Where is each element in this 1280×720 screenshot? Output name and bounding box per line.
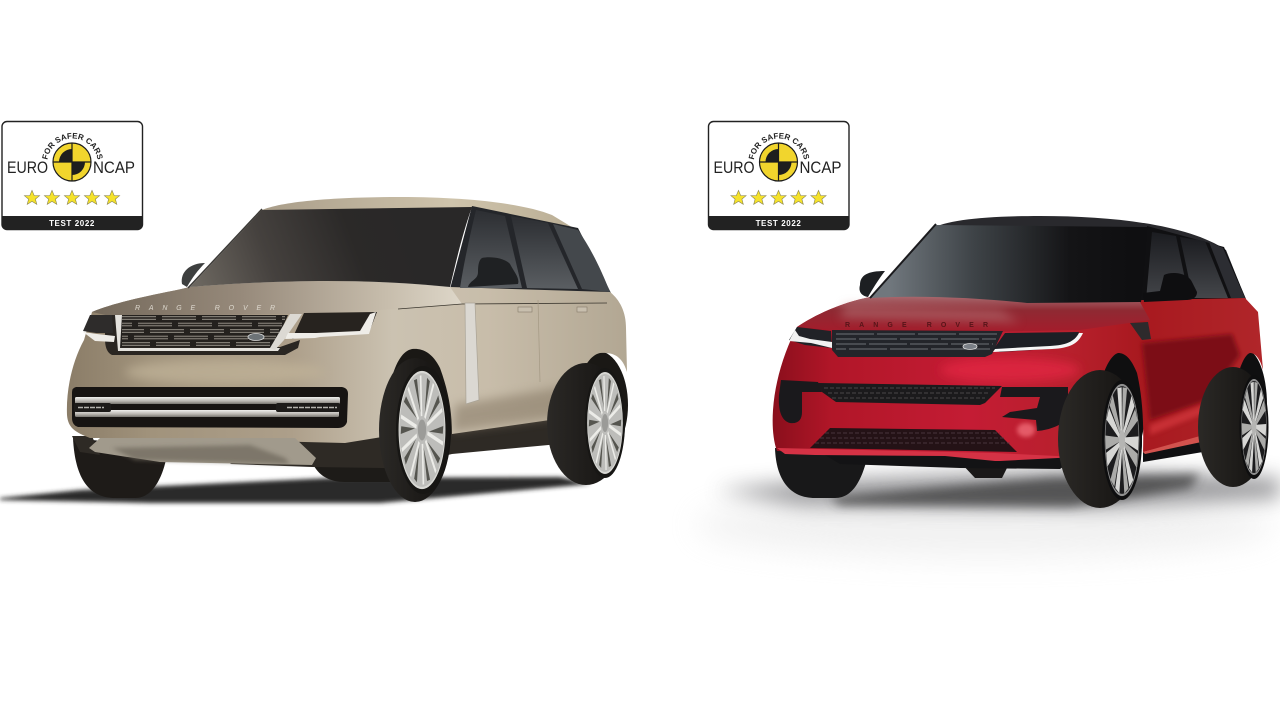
rear wheel well xyxy=(1225,350,1267,460)
car: Range Rover Sport in red xyxy=(695,216,1280,557)
chrome bars xyxy=(74,397,340,417)
hood xyxy=(797,296,1150,332)
right black band and vent xyxy=(1000,387,1068,431)
hood lettering: RANGE ROVER xyxy=(845,322,988,329)
car: Range Rover in champagne xyxy=(0,197,628,503)
front wheel xyxy=(379,358,451,502)
hood lettering: RANGE ROVER xyxy=(135,305,275,312)
grille xyxy=(832,330,1003,357)
lower black body xyxy=(820,452,1080,469)
badge: Euro NCAP left xyxy=(1,120,144,230)
door mirror right xyxy=(468,257,518,287)
door lower shading xyxy=(452,385,575,432)
badge: Euro NCAP right xyxy=(708,120,850,230)
roof xyxy=(932,216,1240,285)
badge footer xyxy=(708,216,849,230)
five stars xyxy=(731,190,826,204)
near front-left tyre xyxy=(775,448,868,498)
ground shadow under Range Rover Sport xyxy=(715,470,1280,508)
near front-left tyre xyxy=(73,438,168,498)
front light glare xyxy=(1017,423,1035,437)
grille surround xyxy=(105,315,300,355)
rear wheel well xyxy=(568,351,628,459)
right light signature xyxy=(285,312,376,339)
footer text: TEST 2022 xyxy=(49,219,95,228)
five stars xyxy=(24,190,120,204)
right headlight xyxy=(292,312,377,339)
greenhouse backing xyxy=(450,206,611,293)
badge frame xyxy=(708,122,849,230)
right light signature xyxy=(993,333,1083,352)
left headlight xyxy=(83,315,113,333)
side vent xyxy=(465,303,479,404)
dark central shadow xyxy=(830,474,1200,507)
bumper highlight xyxy=(125,360,325,384)
right headlight xyxy=(993,332,1079,352)
far-side tyre xyxy=(960,462,1010,478)
ground shadow under Range Rover xyxy=(0,477,590,503)
left headlight xyxy=(789,327,832,348)
roof xyxy=(258,197,580,232)
A-pillar xyxy=(188,209,262,288)
NCAP wordmark: NCAP xyxy=(93,158,135,177)
rear wheel xyxy=(547,363,625,485)
beltline xyxy=(398,303,607,309)
lower grille xyxy=(72,387,348,428)
far-side tyre xyxy=(312,462,395,482)
crash test target xyxy=(760,143,798,181)
windshield xyxy=(870,225,1148,303)
door details xyxy=(518,300,587,382)
door mirror left xyxy=(182,263,205,287)
crash test target xyxy=(53,143,91,181)
slogan: FOR SAFER CARS xyxy=(748,132,810,160)
bonnet glare xyxy=(840,305,1020,322)
body paint xyxy=(773,296,1263,458)
badge footer xyxy=(2,216,142,230)
body paint xyxy=(67,281,627,443)
door mirror right xyxy=(1143,273,1197,302)
upper intake mesh xyxy=(824,388,995,398)
soft floor glow xyxy=(695,493,1275,557)
door reflection xyxy=(1150,398,1226,435)
front wheel well xyxy=(1085,350,1145,470)
left light signature xyxy=(789,330,832,348)
badge frame xyxy=(2,122,142,230)
grille xyxy=(115,314,302,351)
fender vent xyxy=(1130,322,1151,340)
left light signature xyxy=(83,332,115,342)
skid plate shadow xyxy=(112,445,290,464)
rear wheel xyxy=(1198,367,1268,487)
front splitter xyxy=(777,448,1077,461)
side windows xyxy=(460,210,610,292)
footer text: TEST 2022 xyxy=(756,219,801,228)
hood xyxy=(92,281,462,316)
EURO wordmark: EURO xyxy=(714,158,754,177)
EURO wordmark: EURO xyxy=(7,158,48,177)
left black band and vent xyxy=(779,380,822,423)
skid plate xyxy=(89,438,316,465)
sill highlight xyxy=(1143,429,1226,454)
front wheel xyxy=(1058,370,1142,508)
door mirror left xyxy=(859,271,885,297)
sill black xyxy=(1143,436,1226,462)
upper intake xyxy=(818,383,1002,405)
windshield xyxy=(190,207,472,287)
lower intake xyxy=(810,428,1017,452)
NCAP wordmark: NCAP xyxy=(800,158,842,177)
door dark panel xyxy=(1142,334,1240,420)
greenhouse backing xyxy=(1140,226,1246,303)
front wheel well xyxy=(378,348,454,472)
A-pillar xyxy=(870,224,936,298)
slogan: FOR SAFER CARS xyxy=(42,132,103,160)
side windows xyxy=(1146,232,1245,300)
front panel glare xyxy=(940,358,1080,382)
lower dark body xyxy=(72,414,572,470)
lower intake mesh xyxy=(815,433,1010,443)
